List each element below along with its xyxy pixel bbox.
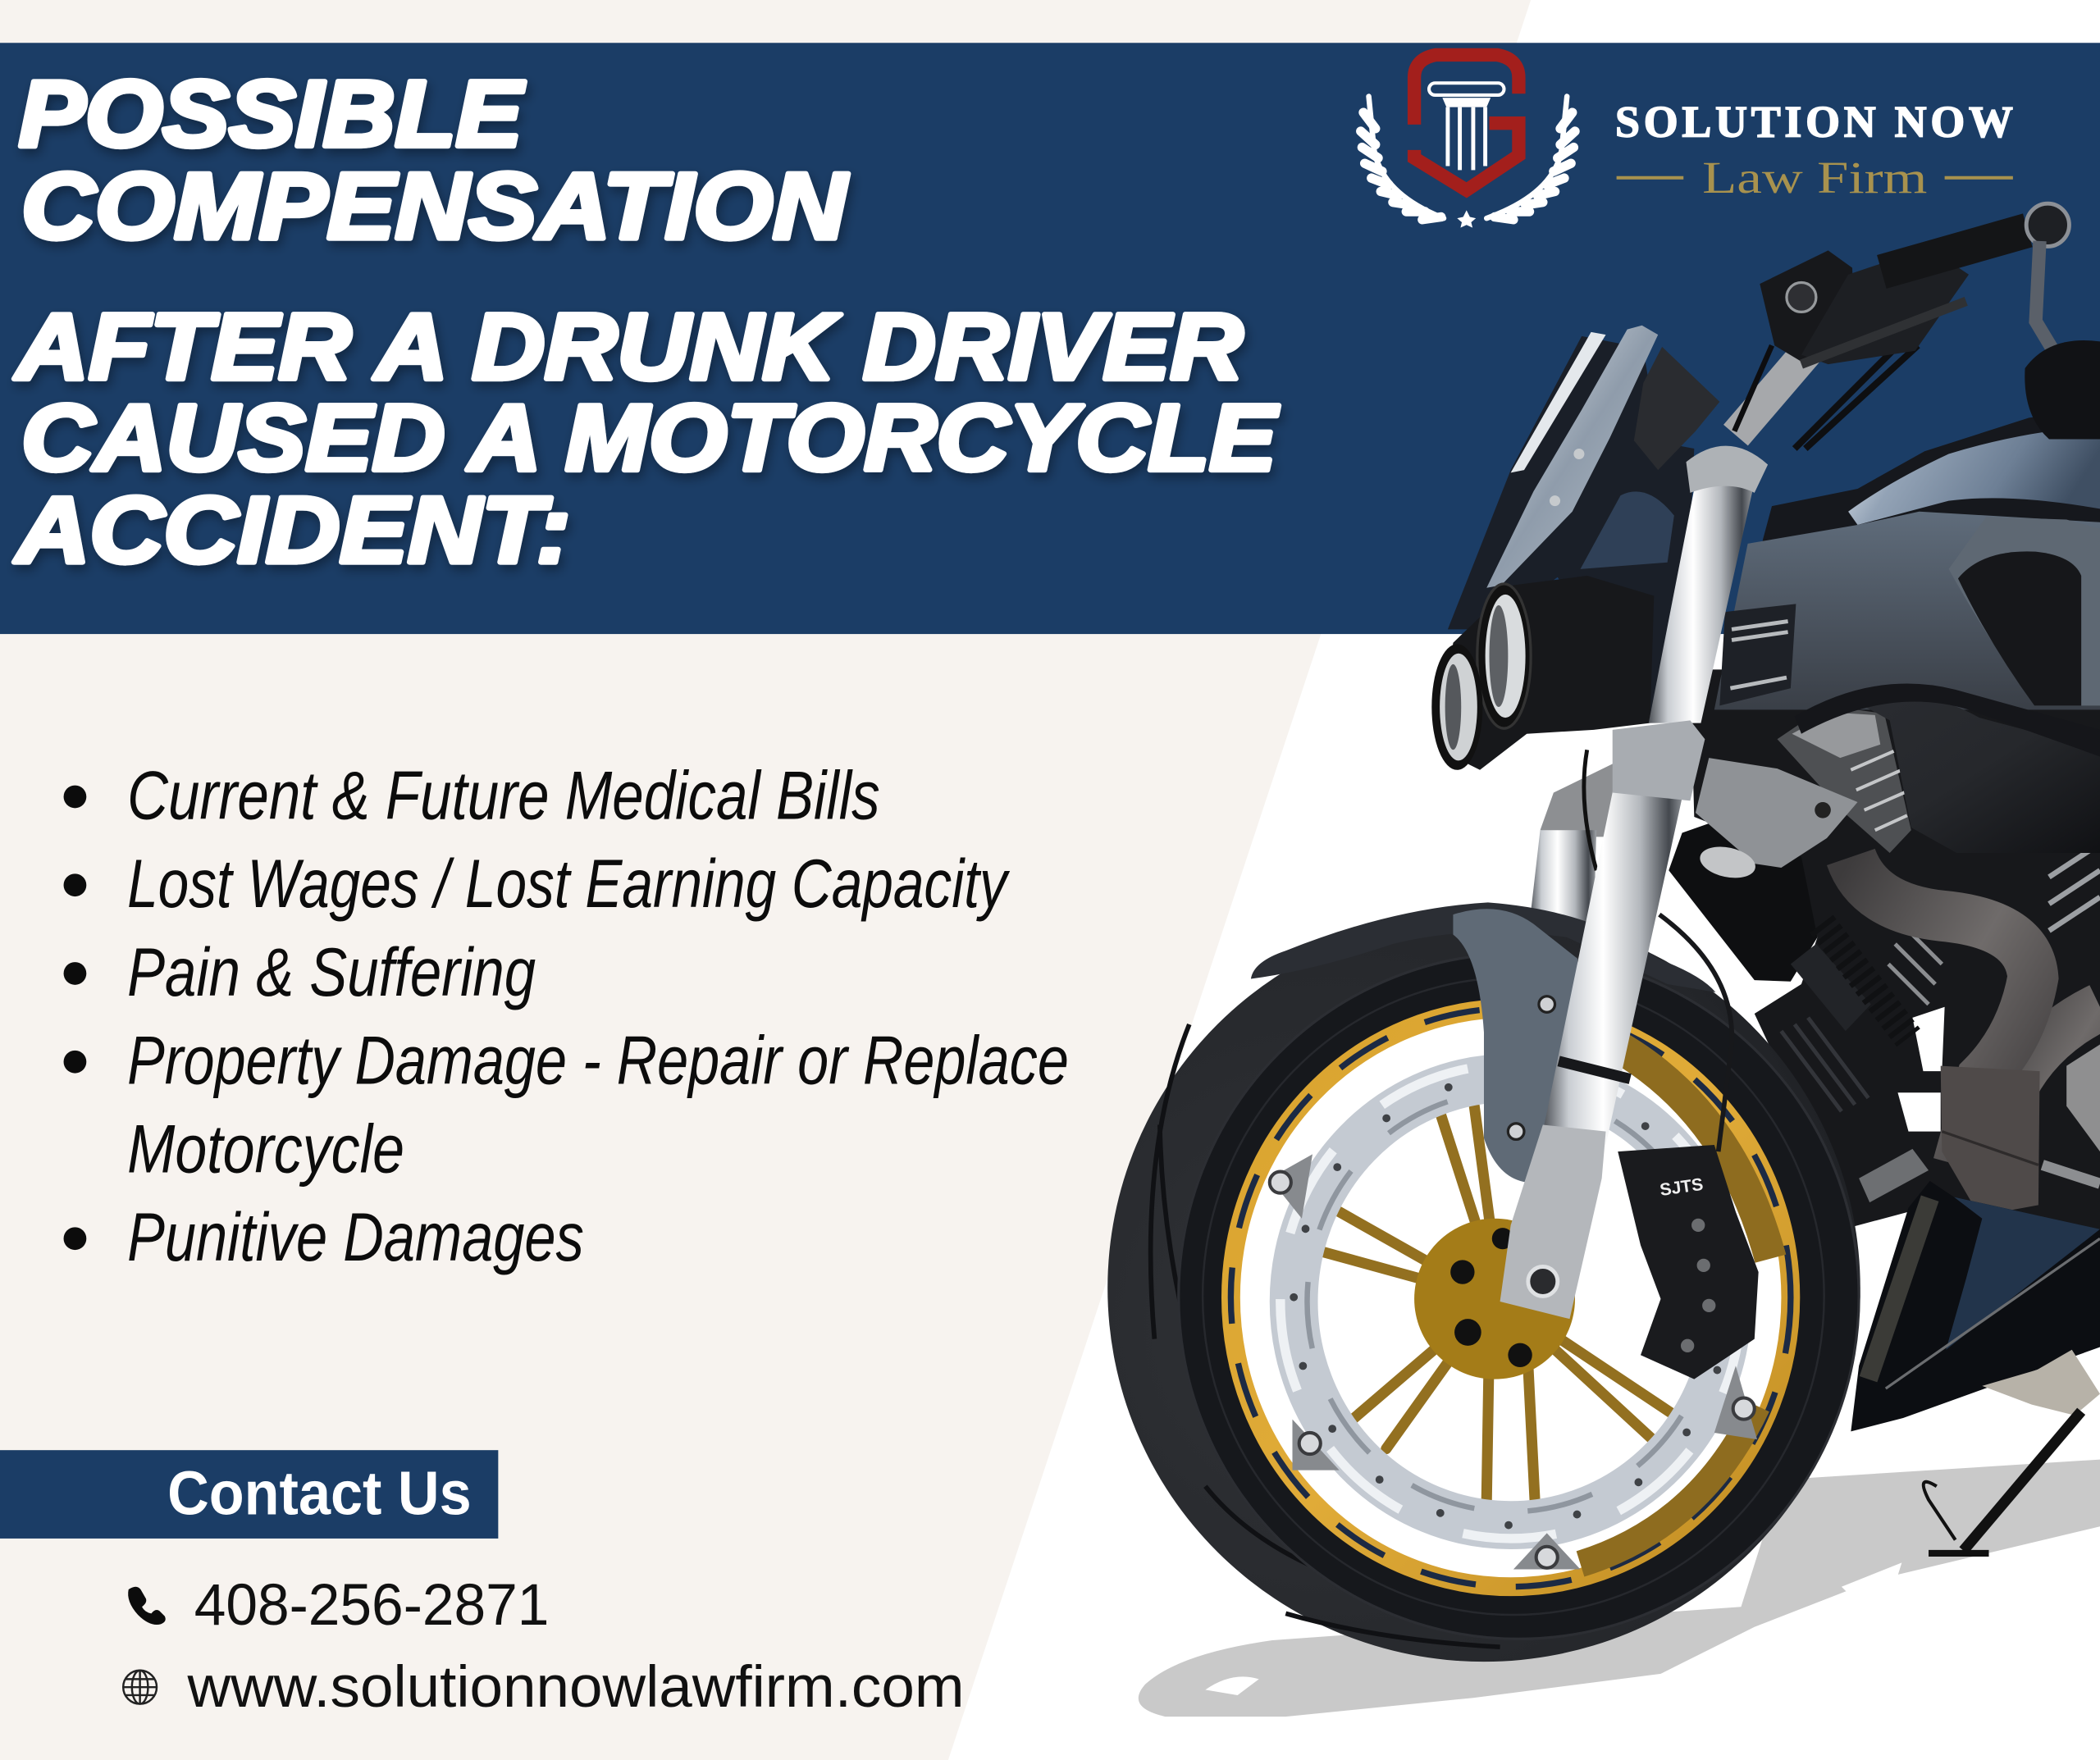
hub	[1414, 1219, 1575, 1379]
icon: phone	[128, 1587, 166, 1625]
radiator	[1669, 817, 1818, 982]
air cleaner cover	[1844, 691, 2100, 853]
exhaust pipes	[1851, 857, 2100, 1215]
spokes	[1323, 1098, 1681, 1500]
icon: shield with column	[1414, 55, 1518, 190]
kickstand	[1924, 1411, 2081, 1553]
exhaust silver guard	[1982, 1350, 2100, 1416]
title: ACCIDENT:	[13, 479, 571, 583]
disc carriers and bolts	[1270, 1154, 1757, 1569]
title: CAUSED A MOTORCYCLE	[21, 386, 1280, 490]
brake disc	[1294, 1078, 1728, 1525]
secondary fork	[1529, 750, 1614, 924]
front wheel	[1107, 914, 1860, 1662]
tire	[1107, 914, 1860, 1662]
title: AFTER A DRUNK DRIVER	[13, 295, 1243, 399]
phone number: 408-256-2871	[194, 1572, 549, 1638]
icon: globe	[123, 1671, 157, 1704]
brake caliper: SJTS	[1659, 1175, 1705, 1200]
title: COMPENSATION	[21, 155, 849, 259]
title	[13, 62, 1280, 583]
contact us banner: Contact Us	[167, 1459, 472, 1528]
engine fins	[1778, 705, 1911, 853]
bullet list	[64, 757, 1069, 1275]
bullet list: Lost Wages / Lost Earning Capacity	[127, 846, 1010, 922]
headlight shroud	[1448, 326, 1719, 723]
logo text: SOLUTION NOW	[1615, 98, 2013, 147]
oil cooler	[1791, 924, 1909, 1037]
motorcycle	[1107, 203, 2100, 1662]
bullet list: Current & Future Medical Bills	[127, 757, 880, 833]
title: POSSIBLE	[19, 62, 526, 166]
motorcycle shadow	[1139, 1460, 2100, 1717]
contact us banner	[0, 1450, 498, 1539]
fender	[1251, 902, 1715, 1183]
bullet list: Motorcycle	[127, 1110, 404, 1187]
main fork	[1500, 446, 1768, 1319]
handlebars	[1734, 203, 2100, 449]
brake caliper	[1618, 1145, 1759, 1379]
tank and body	[1714, 408, 2100, 709]
headlights	[1431, 576, 1654, 770]
icon: laurel wreath	[1361, 97, 1575, 228]
website: www.solutionnowlawfirm.com	[187, 1654, 965, 1720]
logo text	[1615, 98, 2013, 203]
frame bracket	[1696, 758, 1857, 882]
logo text: Law Firm	[1702, 153, 1927, 203]
bullet list: Property Damage - Repair or Replace	[127, 1023, 1069, 1099]
rear engine and frame	[1690, 669, 2100, 1238]
bullet list: Punitive Damages	[127, 1199, 584, 1275]
seat band above cover	[1795, 683, 2100, 756]
brake cable	[1659, 914, 1732, 1151]
bullet list: Pain & Suffering	[127, 934, 536, 1010]
lower fairing	[1851, 1181, 2100, 1431]
logo	[1361, 55, 2013, 228]
rim	[1230, 1008, 1791, 1587]
